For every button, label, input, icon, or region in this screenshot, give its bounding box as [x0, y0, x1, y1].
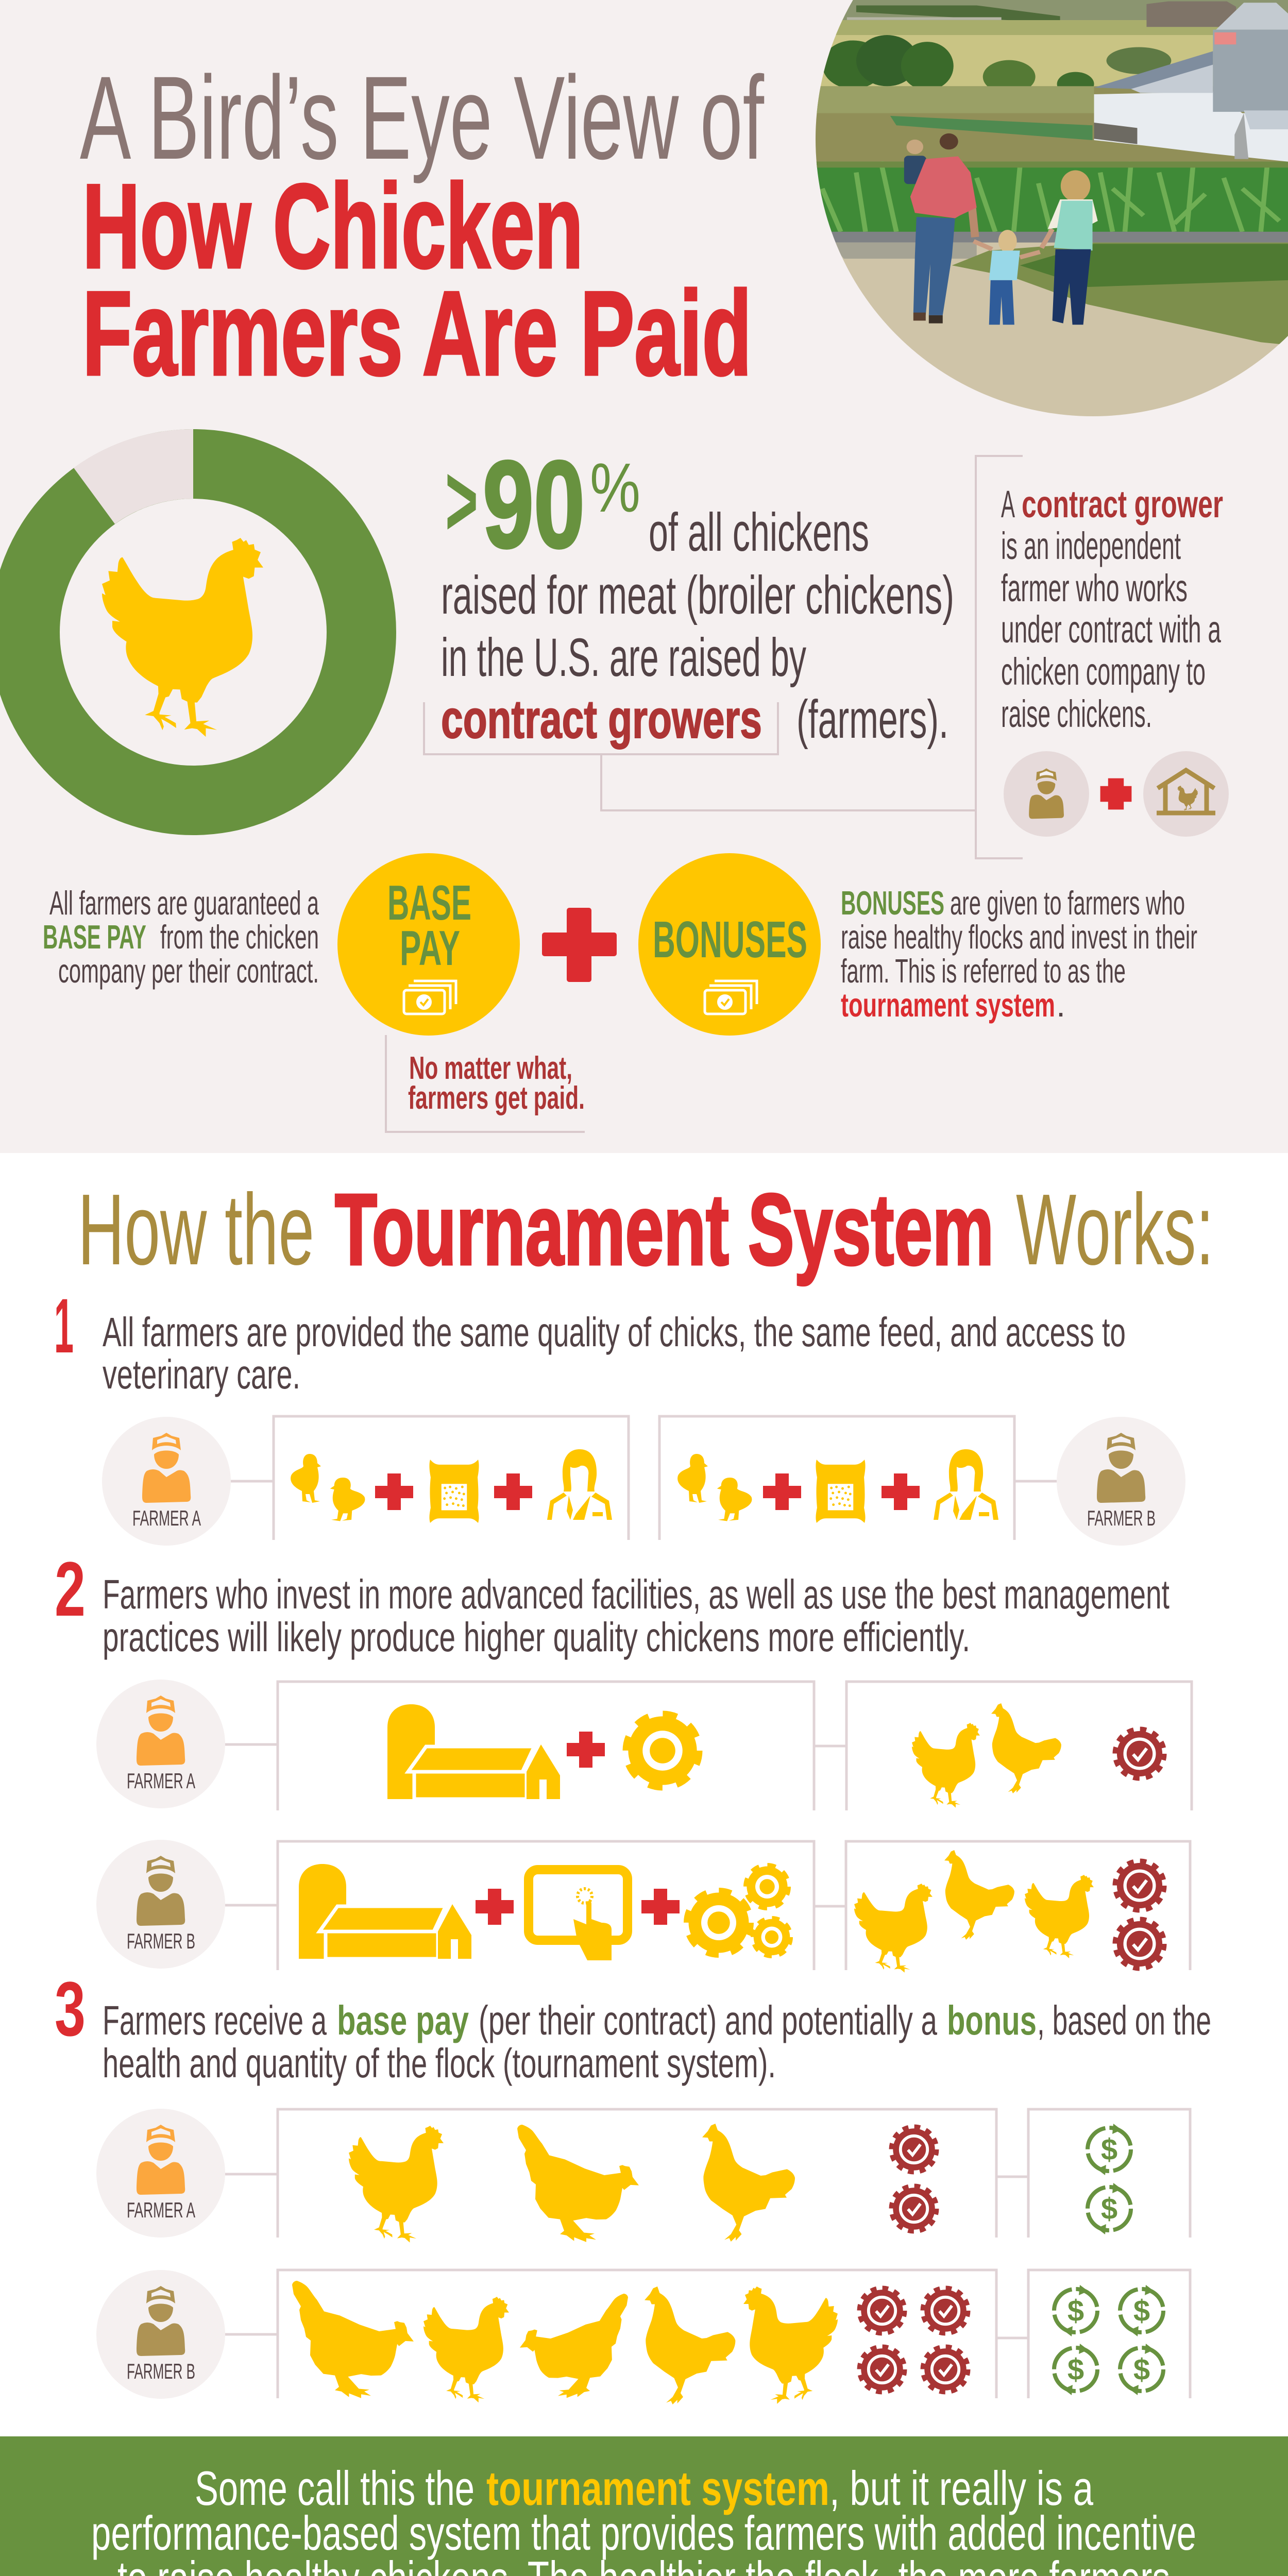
- statistic: over 90 percent of chickens: contract growers: [441, 689, 762, 750]
- icon: plus sign: [542, 908, 617, 982]
- step 2 farmer A results: [814, 1682, 1192, 1810]
- text: base pay guarantee: BASE PAY: [43, 918, 146, 956]
- step 3 text: base pay: [337, 1997, 469, 2043]
- step 3 farmer B: [96, 2270, 225, 2399]
- step 1 farmer B: [1057, 1417, 1185, 1546]
- step 1 farmer B: FARMER B: [1087, 1506, 1156, 1530]
- step 3 text: (per their contract) and potentially a: [479, 1997, 937, 2043]
- statistic: over 90 percent of chickens: [441, 435, 954, 750]
- step 3 farmer A bonus: [996, 2109, 1190, 2238]
- step 3 farmer B bonus: [996, 2270, 1190, 2398]
- panel: green performance-based statement: tournament system: [486, 2461, 829, 2515]
- icon: farmer plus barn: [1004, 751, 1229, 837]
- step 3 farmer A bonus: $: [1101, 2133, 1117, 2166]
- statistic: over 90 percent of chickens: >: [445, 443, 478, 558]
- step 3 text: Farmers receive a: [103, 1997, 327, 2043]
- text: bonuses explanation: [841, 884, 1197, 1024]
- step 3 farmer B bonus: $: [1067, 2294, 1084, 2328]
- step 3 text: bonus: [947, 1997, 1037, 2043]
- step 2 farmer A investments: [225, 1682, 814, 1810]
- title: [80, 52, 765, 400]
- step 1 farmer A: [102, 1417, 231, 1546]
- panel: green performance-based statement: , but it really is a: [829, 2461, 1094, 2515]
- step 3 text: 3: [55, 1965, 86, 2052]
- step 3 text: [55, 1965, 1211, 2086]
- step 3 farmer B bonus: $: [1133, 2353, 1150, 2386]
- text: base pay guarantee: [43, 884, 319, 990]
- badge: base pay: [337, 853, 520, 1036]
- title: How Chicken: [82, 160, 583, 293]
- callout: contract grower definition: raise chickens.: [1001, 692, 1152, 735]
- icon: hen: [102, 538, 263, 737]
- panel: green performance-based statement: Some call this the: [195, 2461, 474, 2515]
- step 2 farmer A: [96, 1680, 225, 1808]
- step 1 box A: chicks, feed, vet: [231, 1416, 629, 1540]
- step 2 farmer B: FARMER B: [127, 1929, 195, 1953]
- panel: green performance-based statement: [0, 2436, 1288, 2576]
- badge: bonuses: BONUSES: [653, 911, 807, 969]
- step 3 farmer B flock: [225, 2270, 996, 2404]
- step 3 farmer B bonus: $: [1067, 2353, 1084, 2386]
- badge: base pay: BASE: [387, 875, 471, 930]
- step 2 text: practices will likely produce higher quality chickens more efficiently.: [103, 1614, 970, 1660]
- heading: how the tournament system works: Tournament System: [335, 1173, 994, 1286]
- step 2 farmer B: [96, 1840, 225, 1969]
- donut chart: over 90 percent: [25, 429, 362, 801]
- photo: farm family walking: [804, 0, 1288, 423]
- statistic: over 90 percent of chickens: of all chickens: [649, 502, 869, 563]
- text: base pay guarantee: All farmers are guaranteed a: [49, 884, 319, 922]
- text: bonuses explanation: farm. This is referred to as the: [841, 952, 1126, 990]
- step 3 farmer A: FARMER A: [127, 2198, 195, 2222]
- note: no matter what: [386, 1035, 585, 1132]
- note: no matter what: No matter what,: [409, 1050, 572, 1086]
- badge: bonuses: [638, 853, 821, 1036]
- step 3 farmer B: FARMER B: [127, 2359, 195, 2383]
- statistic: over 90 percent of chickens: (farmers).: [796, 689, 948, 750]
- text: bonuses explanation: .: [1056, 986, 1065, 1024]
- step 2 farmer B investments: [225, 1841, 814, 1970]
- step 3 farmer A flock: [225, 2109, 996, 2243]
- step 1 box B: chicks, feed, vet: [659, 1416, 1057, 1540]
- top section background: [0, 0, 1288, 1153]
- step 3 farmer A: [96, 2109, 225, 2238]
- title: Farmers Are Paid: [82, 267, 752, 400]
- text: bonuses explanation: tournament system: [841, 986, 1055, 1024]
- statistic: over 90 percent of chickens: raised for meat (broiler chickens): [441, 565, 954, 625]
- step 3 farmer B bonus: $: [1133, 2294, 1150, 2328]
- statistic: over 90 percent of chickens: in the U.S. are raised by: [441, 628, 806, 688]
- step 2 text: 2: [55, 1546, 86, 1632]
- text: base pay guarantee: company per their contract.: [58, 952, 319, 990]
- callout: contract grower definition: A: [1001, 483, 1015, 526]
- step 2 farmer A: FARMER A: [127, 1769, 195, 1793]
- step 2 farmer B results: [814, 1841, 1190, 1973]
- connector bracket: [424, 456, 1023, 858]
- heading: how the tournament system works: How the: [78, 1173, 314, 1286]
- step 1 farmer A: FARMER A: [132, 1506, 201, 1530]
- step 1 text: veterinary care.: [103, 1351, 300, 1397]
- statistic: over 90 percent of chickens: %: [590, 449, 640, 527]
- step 3 farmer A bonus: $: [1101, 2192, 1117, 2226]
- step 3 text: health and quantity of the flock (tournament system).: [103, 2040, 776, 2086]
- note: no matter what: farmers get paid.: [408, 1080, 585, 1116]
- title: A Bird’s Eye View of: [80, 52, 765, 184]
- step 1 text: [54, 1282, 1126, 1397]
- callout: contract grower definition: [1001, 483, 1223, 735]
- text: base pay guarantee: from the chicken: [160, 918, 319, 956]
- text: bonuses explanation: BONUSES: [841, 884, 944, 922]
- badge: base pay: PAY: [400, 921, 460, 976]
- statistic: over 90 percent of chickens: 90: [483, 435, 585, 573]
- step 2 text: [55, 1546, 1170, 1660]
- step 1 text: 1: [54, 1282, 74, 1369]
